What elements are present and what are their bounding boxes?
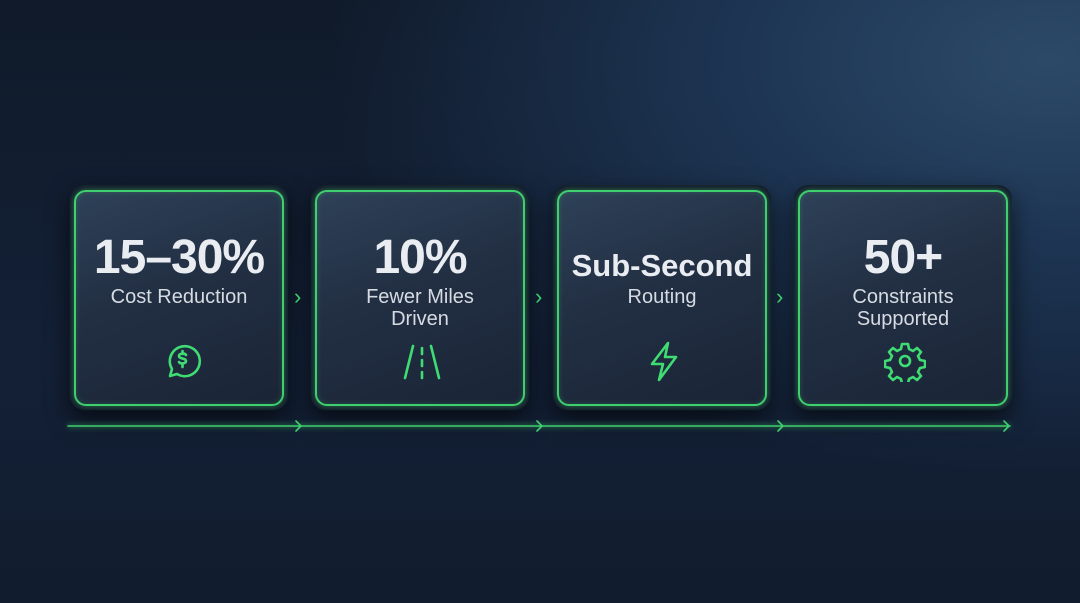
text: › — [535, 284, 542, 309]
icon: lightning — [650, 342, 678, 382]
label: fewer miles driven: Driven — [391, 308, 449, 330]
icon: dollar chat bubble — [168, 344, 202, 378]
label: fewer miles driven: Fewer Miles — [366, 286, 474, 308]
text: › — [776, 284, 783, 309]
icon: road — [404, 344, 440, 380]
stat: 10%: 10% — [373, 231, 467, 284]
card: fewer miles — [311, 185, 529, 410]
label: fewer miles driven — [366, 286, 474, 330]
icon: gear — [884, 342, 926, 382]
card: sub-second routing — [553, 185, 771, 410]
timeline arrow — [66, 420, 1012, 432]
chevron arrows between cards — [294, 284, 783, 309]
label: constraints supported: Supported — [857, 308, 949, 330]
stat: 50+: 50+ — [864, 231, 942, 284]
label: constraints supported: Constraints — [852, 286, 954, 308]
card: constraints — [794, 185, 1012, 410]
label: routing: Routing — [628, 286, 696, 308]
text: › — [294, 284, 301, 309]
stat: sub-second: Sub-Second — [572, 248, 752, 283]
label: cost reduction: Cost Reduction — [111, 286, 247, 308]
label: constraints supported — [852, 286, 954, 330]
stat: 15-30%: 15–30% — [94, 231, 264, 284]
card: cost reduction — [70, 185, 288, 410]
